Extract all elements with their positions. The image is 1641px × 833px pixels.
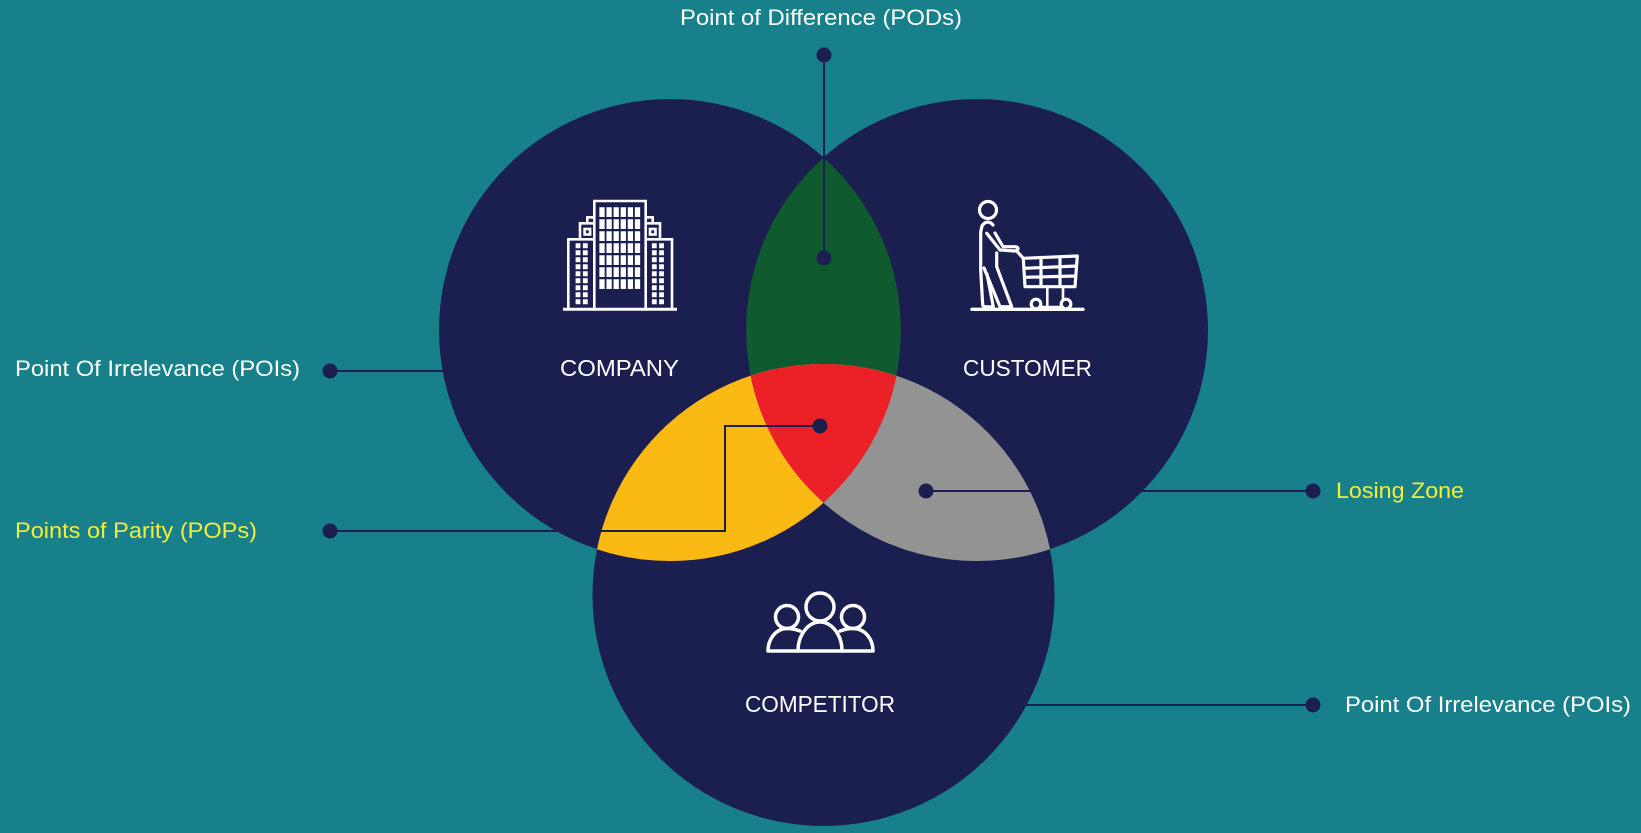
region: customer and competitor overlap [750, 364, 1050, 561]
region: company and competitor overlap [597, 364, 896, 561]
circle: company [439, 99, 901, 561]
connector: left point of irrelevance [322, 364, 445, 378]
region: all three overlap [750, 364, 896, 503]
region: company and customer overlap [746, 158, 901, 503]
circle: customer [746, 99, 1208, 561]
circle: competitor [592, 364, 1054, 826]
heading: losing zone: Losing Zone [1336, 478, 1464, 503]
heading: right point of irrelevance: Point Of Irrelevance (POIs) [1345, 692, 1631, 717]
connector: point of difference [816, 48, 832, 266]
icon: group of people [768, 593, 873, 651]
heading: left point of irrelevance: Point Of Irrelevance (POIs) [15, 356, 300, 381]
venn diagram [439, 99, 1208, 826]
icon: shopper with cart [972, 202, 1083, 309]
label: company: COMPANY [560, 355, 679, 381]
label: customer: CUSTOMER [963, 355, 1092, 381]
heading: points of parity: Points of Parity (POPs) [15, 518, 257, 543]
connector: right point of irrelevance [1025, 698, 1320, 712]
label: competitor: COMPETITOR [745, 691, 895, 717]
connector: losing zone [918, 484, 1320, 498]
icon: office building [563, 201, 677, 309]
heading: point of difference: Point of Difference (PODs) [680, 5, 962, 30]
connector: points of parity [322, 418, 828, 538]
